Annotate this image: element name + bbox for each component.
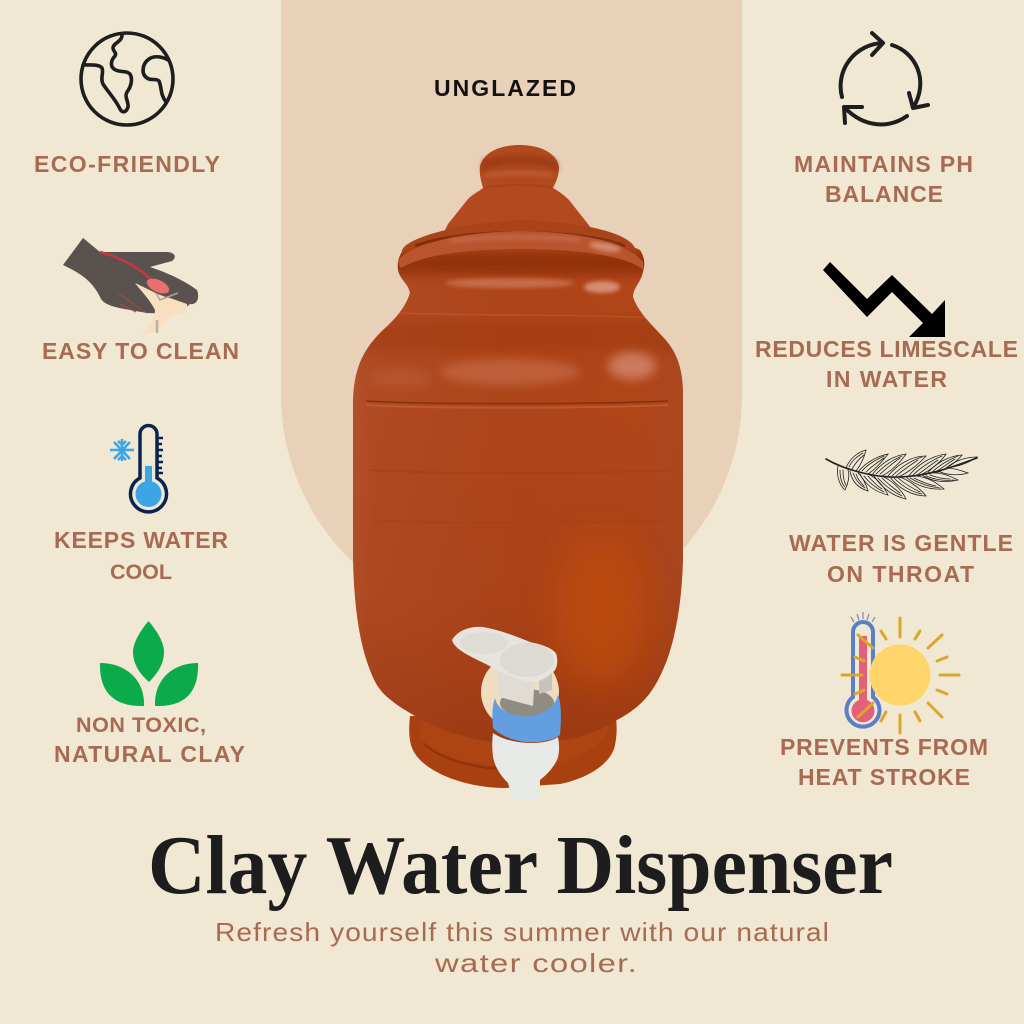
- arch panel behind the dispenser: [281, 0, 742, 626]
- label: [794, 151, 973, 207]
- white tap with blue collar: [452, 627, 561, 800]
- label: [789, 530, 1013, 587]
- subtitle: water cooler.: [434, 948, 638, 978]
- label: PREVENTS FROM: [780, 734, 988, 760]
- left feature: non toxic, natural clay: [54, 621, 245, 767]
- label: [54, 713, 245, 767]
- icon: gloved hand with cloth: [63, 238, 198, 333]
- icon: recycle arrows: [841, 33, 928, 124]
- jar foot: [409, 716, 617, 788]
- subtitle: Refresh yourself this summer with our natural: [215, 917, 830, 947]
- icon: hot thermometer and sun: [842, 612, 959, 733]
- label: COOL: [110, 560, 172, 584]
- label: ON THROAT: [827, 561, 974, 587]
- label: EASY TO CLEAN: [42, 338, 239, 364]
- left feature: eco-friendly: [34, 33, 220, 177]
- jar rim: [399, 231, 643, 269]
- label: IN WATER: [826, 366, 947, 392]
- icon: feather: [826, 450, 977, 499]
- clay water dispenser illustration: [345, 145, 690, 800]
- left feature: keeps water cool: [54, 426, 228, 584]
- right feature: reduces limescale: [755, 262, 1018, 392]
- label: NON TOXIC,: [76, 713, 206, 737]
- label: ECO-FRIENDLY: [34, 151, 220, 177]
- label: HEAT STROKE: [798, 764, 970, 790]
- label: NATURAL CLAY: [54, 741, 245, 767]
- left feature: easy to clean: [42, 238, 239, 364]
- icon: globe: [81, 33, 173, 125]
- jar body: [353, 244, 683, 743]
- right feature: prevents from heat stroke: [780, 612, 988, 790]
- icon: green leaves: [100, 621, 198, 706]
- subtitle: [215, 917, 830, 978]
- label: [755, 336, 1018, 392]
- icon: downward zigzag arrow: [823, 262, 945, 337]
- right feature: maintains ph balance: [794, 33, 973, 207]
- heading: unglazed: UNGLAZED: [434, 75, 576, 101]
- label: WATER IS GENTLE: [789, 530, 1013, 556]
- label: [54, 527, 228, 584]
- title: Clay Water Dispenser: [148, 819, 893, 912]
- label: REDUCES LIMESCALE: [755, 336, 1018, 362]
- icon: cold thermometer: [110, 426, 167, 512]
- label: KEEPS WATER: [54, 527, 228, 553]
- label: MAINTAINS PH: [794, 151, 973, 177]
- right feature: water is gentle on throat: [789, 450, 1013, 587]
- jar lid: [402, 145, 636, 252]
- label: [780, 734, 988, 790]
- label: BALANCE: [825, 181, 943, 207]
